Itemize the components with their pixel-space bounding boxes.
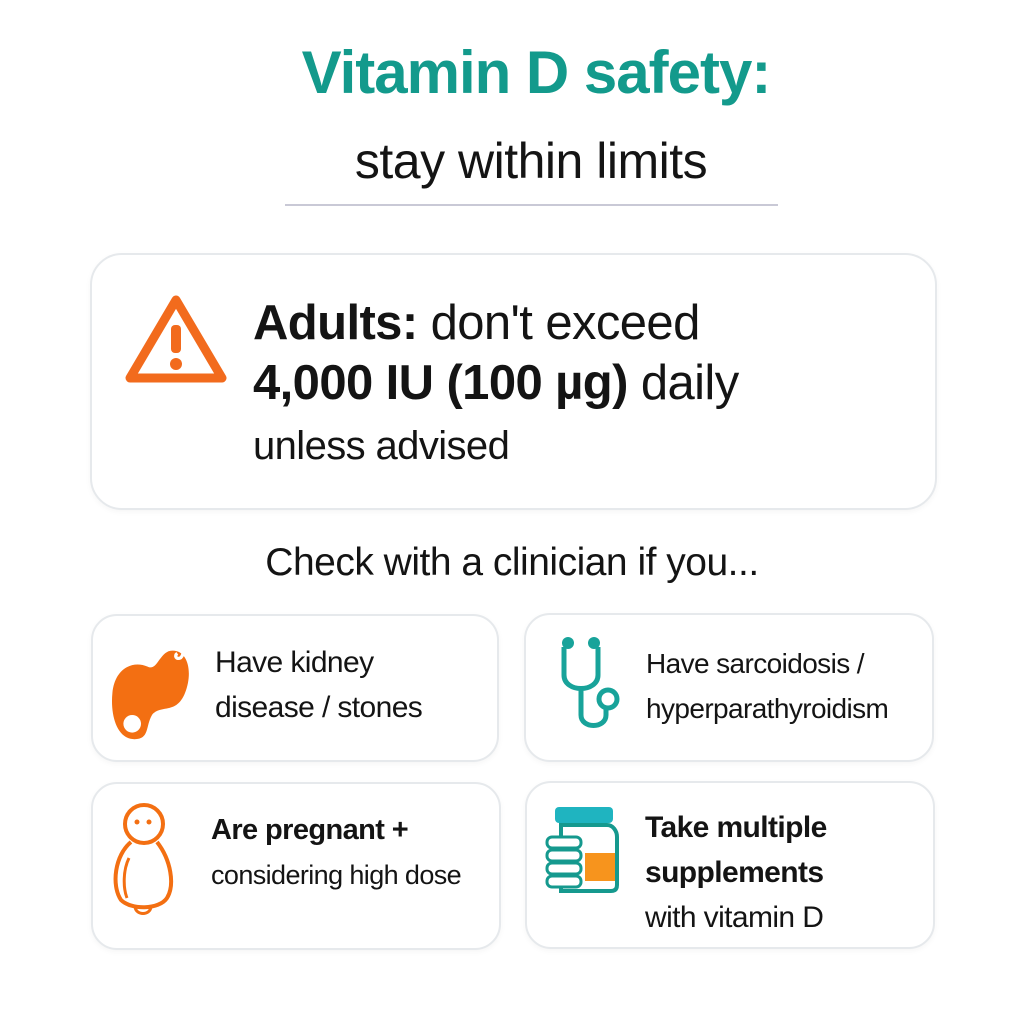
text: Are pregnant + [211,814,408,846]
text: Have sarcoidosis / [646,648,864,679]
text: supplements [645,856,823,889]
subtitle: stay within limits [355,133,707,189]
text [646,648,888,724]
icon: kidney [112,650,189,740]
text: disease / stones [215,691,422,724]
icon: pregnant figure [114,803,174,915]
panel: supplements [525,781,935,949]
text: considering high dose [211,860,461,890]
title: Vitamin D safety: [302,39,770,106]
limit text [253,296,740,468]
text: hyperparathyroidism [646,693,888,724]
text: Have kidney [215,646,374,679]
text [215,646,422,724]
icon: warning triangle [126,296,226,382]
panel: sarcoidosis [524,613,934,762]
panel: pregnant [91,782,501,950]
icon: supplement bottle [546,807,619,893]
divider line [285,204,778,206]
limit text: Adults: don't exceed [253,296,700,350]
icon: stethoscope [562,637,620,728]
panel: kidney [91,614,499,762]
limit text: 4,000 IU (100 µg) daily [253,356,739,410]
panel: adult limit [90,253,937,510]
text [211,814,461,890]
text [645,811,827,934]
limit text: unless advised [253,424,509,468]
section heading: Check with a clinician if you... [265,541,759,584]
text: Take multiple [645,811,827,844]
text: with vitamin D [645,901,823,934]
